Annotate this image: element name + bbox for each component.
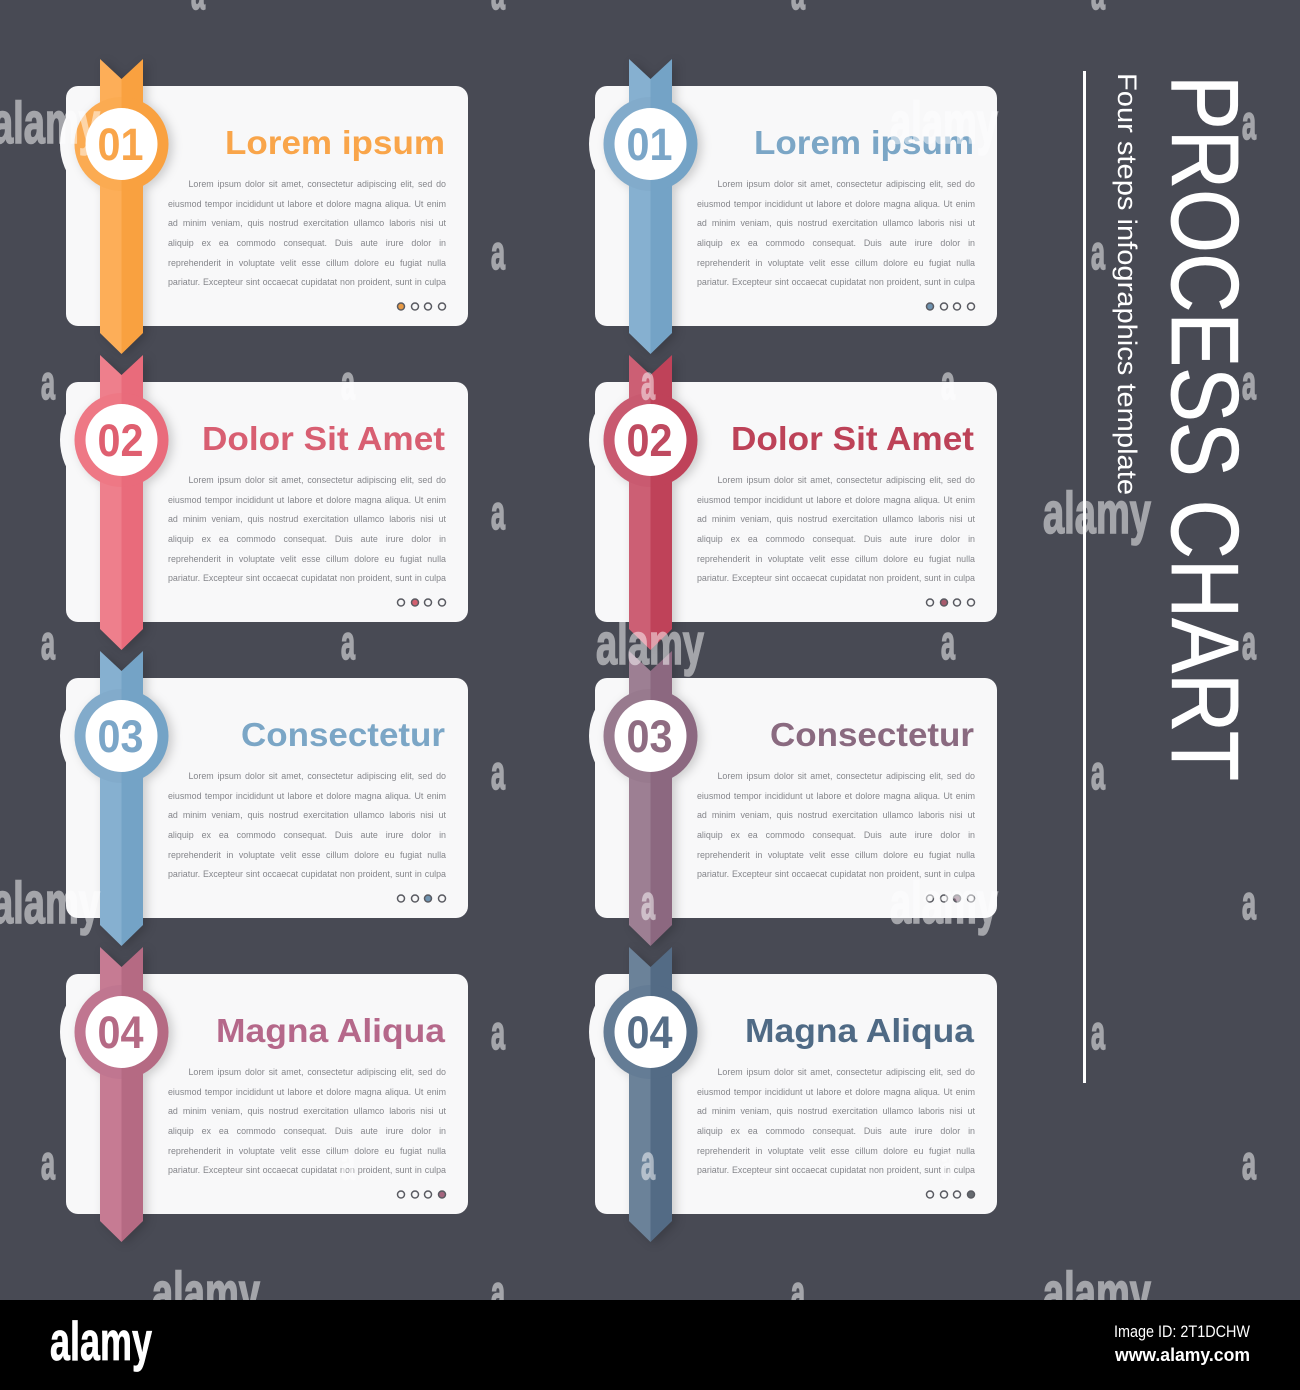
ribbon and badge: Dolor Sit Amet <box>731 420 974 457</box>
ribbon and badge <box>60 651 446 946</box>
watermark overlay: a <box>941 617 955 670</box>
body text: eiusmod tempor incididunt ut labore et dolore magna aliqua. Ut enim <box>168 1087 446 1097</box>
watermark overlay: alamy <box>1043 481 1151 546</box>
watermark overlay: a <box>641 1137 655 1190</box>
body text: ad minim veniam, quis nostrud exercitation ullamco laboris nisi ut <box>697 810 975 820</box>
watermark overlay: alamy <box>1043 1261 1151 1326</box>
body text <box>697 475 975 583</box>
body text: ad minim veniam, quis nostrud exercitation ullamco laboris nisi ut <box>697 514 975 524</box>
watermark overlay: a <box>491 1007 505 1060</box>
body text: ad minim veniam, quis nostrud exercitation ullamco laboris nisi ut <box>697 218 975 228</box>
ribbon and badge: 03 <box>98 711 144 762</box>
watermark overlay: a <box>1242 1137 1256 1190</box>
body text: pariatur. Excepteur sint occaecat cupidatat non proident, sunt in culpa <box>697 869 975 879</box>
body text: ad minim veniam, quis nostrud exercitation ullamco laboris nisi ut <box>168 218 446 228</box>
body text: reprehenderit in voluptate velit esse cillum dolore eu fugiat nulla <box>168 850 446 860</box>
watermark overlay: a <box>491 227 505 280</box>
body text <box>697 1067 975 1175</box>
title block: rotated heading, subtitle and rule <box>1083 71 1258 1083</box>
ribbon and badge <box>589 59 976 354</box>
body text: pariatur. Excepteur sint occaecat cupidatat non proident, sunt in culpa <box>697 1165 975 1175</box>
watermark overlay: a <box>341 1137 355 1190</box>
body text: pariatur. Excepteur sint occaecat cupidatat non proident, sunt in culpa <box>168 277 446 287</box>
body text: pariatur. Excepteur sint occaecat cupidatat non proident, sunt in culpa <box>168 1165 446 1175</box>
image id: Image ID: 2T1DCHW <box>1114 1322 1250 1341</box>
watermark overlay: a <box>341 357 355 410</box>
panel: second column step 04 slate <box>589 947 997 1242</box>
ribbon and badge <box>60 59 446 354</box>
body text: reprehenderit in voluptate velit esse cillum dolore eu fugiat nulla <box>697 258 975 268</box>
watermark overlay: a <box>791 1267 805 1320</box>
watermark overlay: a <box>1091 1007 1105 1060</box>
body text: Lorem ipsum dolor sit amet, consectetur adipiscing elit, sed do <box>188 475 446 485</box>
watermark overlay: a <box>1242 357 1256 410</box>
ribbon and badge: Consectetur <box>770 716 974 753</box>
watermark overlay: a <box>941 1137 955 1190</box>
card background <box>595 678 997 918</box>
subtitle: Four steps infographics template <box>1112 73 1142 495</box>
title: PROCESS CHART <box>1151 75 1258 781</box>
body text: ad minim veniam, quis nostrud exercitation ullamco laboris nisi ut <box>168 1106 446 1116</box>
panel: second column step 03 plum <box>589 651 997 946</box>
body text <box>697 771 975 879</box>
watermark overlay: a <box>1242 97 1256 150</box>
ribbon and badge: 04 <box>626 1007 672 1058</box>
watermark overlay: a <box>491 487 505 540</box>
ribbon and badge <box>60 355 446 650</box>
body text: aliquip ex ea commodo consequat. Duis aute irure dolor in <box>168 1126 446 1136</box>
body text: aliquip ex ea commodo consequat. Duis aute irure dolor in <box>697 830 975 840</box>
body text <box>697 179 975 287</box>
ribbon and badge: 01 <box>626 119 672 170</box>
body text: aliquip ex ea commodo consequat. Duis aute irure dolor in <box>697 238 975 248</box>
ribbon and badge: 04 <box>98 1007 144 1058</box>
ribbon and badge <box>589 651 976 946</box>
ribbon and badge: Dolor Sit Amet <box>202 420 445 457</box>
ribbon and badge <box>589 947 976 1242</box>
watermark overlay: a <box>41 1137 55 1190</box>
body text: reprehenderit in voluptate velit esse cillum dolore eu fugiat nulla <box>697 850 975 860</box>
body text: Lorem ipsum dolor sit amet, consectetur adipiscing elit, sed do <box>718 771 975 781</box>
body text: eiusmod tempor incididunt ut labore et dolore magna aliqua. Ut enim <box>168 199 446 209</box>
ribbon and badge: 03 <box>626 711 672 762</box>
body text: eiusmod tempor incididunt ut labore et dolore magna aliqua. Ut enim <box>697 1087 975 1097</box>
body text <box>168 179 446 287</box>
body text: Lorem ipsum dolor sit amet, consectetur adipiscing elit, sed do <box>188 771 446 781</box>
watermark overlay: a <box>1091 227 1105 280</box>
body text: aliquip ex ea commodo consequat. Duis aute irure dolor in <box>168 830 446 840</box>
body text: reprehenderit in voluptate velit esse cillum dolore eu fugiat nulla <box>168 258 446 268</box>
panel: step 04 mauve <box>60 947 468 1242</box>
website: www.alamy.com <box>1114 1345 1250 1365</box>
panel: second column step 01 blue <box>589 59 997 354</box>
body text: aliquip ex ea commodo consequat. Duis aute irure dolor in <box>168 534 446 544</box>
body text: eiusmod tempor incididunt ut labore et dolore magna aliqua. Ut enim <box>697 495 975 505</box>
ribbon and badge: 02 <box>98 415 144 466</box>
body text: eiusmod tempor incididunt ut labore et dolore magna aliqua. Ut enim <box>697 199 975 209</box>
card background <box>595 382 997 622</box>
body text: pariatur. Excepteur sint occaecat cupidatat non proident, sunt in culpa <box>697 277 975 287</box>
ribbon and badge <box>60 947 446 1242</box>
watermark overlay: a <box>41 357 55 410</box>
body text <box>168 475 446 583</box>
card background <box>66 974 468 1214</box>
watermark overlay: alamy <box>596 612 704 677</box>
body text: aliquip ex ea commodo consequat. Duis aute irure dolor in <box>697 1126 975 1136</box>
card background <box>66 678 468 918</box>
body text: eiusmod tempor incididunt ut labore et dolore magna aliqua. Ut enim <box>168 791 446 801</box>
watermark overlay: alamy <box>152 1261 260 1326</box>
watermark overlay: a <box>1242 617 1256 670</box>
body text: Lorem ipsum dolor sit amet, consectetur adipiscing elit, sed do <box>718 1067 975 1077</box>
ribbon and badge: 02 <box>626 415 672 466</box>
watermark overlay: a <box>641 877 655 930</box>
vertical rule <box>1083 71 1086 1083</box>
card background <box>595 974 997 1214</box>
body text: aliquip ex ea commodo consequat. Duis aute irure dolor in <box>168 238 446 248</box>
footer band with stock credit <box>0 1300 1300 1390</box>
watermark overlay: a <box>1091 747 1105 800</box>
ribbon and badge: Magna Aliqua <box>745 1012 975 1049</box>
watermark overlay: a <box>341 617 355 670</box>
body text: Lorem ipsum dolor sit amet, consectetur adipiscing elit, sed do <box>188 179 446 189</box>
panel: second column step 02 crimson <box>589 355 997 650</box>
watermark overlay: a <box>491 747 505 800</box>
body text: ad minim veniam, quis nostrud exercitation ullamco laboris nisi ut <box>168 810 446 820</box>
body text: eiusmod tempor incididunt ut labore et dolore magna aliqua. Ut enim <box>168 495 446 505</box>
body text <box>168 771 446 879</box>
watermark overlay: alamy <box>890 91 998 156</box>
body text <box>168 1067 446 1175</box>
body text: reprehenderit in voluptate velit esse cillum dolore eu fugiat nulla <box>697 1146 975 1156</box>
body text: Lorem ipsum dolor sit amet, consectetur adipiscing elit, sed do <box>718 179 975 189</box>
body text: ad minim veniam, quis nostrud exercitation ullamco laboris nisi ut <box>168 514 446 524</box>
panel: step 02 coral <box>60 355 468 650</box>
watermark overlay: alamy <box>890 871 998 936</box>
card background <box>66 382 468 622</box>
body text: reprehenderit in voluptate velit esse cillum dolore eu fugiat nulla <box>697 554 975 564</box>
body text: reprehenderit in voluptate velit esse cillum dolore eu fugiat nulla <box>168 554 446 564</box>
watermark overlay: a <box>491 1267 505 1320</box>
body text: pariatur. Excepteur sint occaecat cupidatat non proident, sunt in culpa <box>168 869 446 879</box>
ribbon and badge: Lorem ipsum <box>225 124 445 161</box>
ribbon and badge: Lorem ipsum <box>754 124 974 161</box>
panel: step 03 blue <box>60 651 468 946</box>
body text: ad minim veniam, quis nostrud exercitation ullamco laboris nisi ut <box>697 1106 975 1116</box>
footer logo: alamy <box>50 1310 152 1372</box>
card background <box>595 86 997 326</box>
ribbon and badge <box>589 355 976 650</box>
watermark overlay: a <box>41 617 55 670</box>
ribbon and badge: 01 <box>98 119 144 170</box>
ribbon and badge: Magna Aliqua <box>216 1012 446 1049</box>
body text: Lorem ipsum dolor sit amet, consectetur adipiscing elit, sed do <box>718 475 975 485</box>
panel: step 01 orange <box>60 59 468 354</box>
watermark overlay: a <box>1242 877 1256 930</box>
watermark overlay: a <box>641 357 655 410</box>
body text: reprehenderit in voluptate velit esse cillum dolore eu fugiat nulla <box>168 1146 446 1156</box>
watermark overlay: a <box>941 357 955 410</box>
body text: pariatur. Excepteur sint occaecat cupidatat non proident, sunt in culpa <box>697 573 975 583</box>
body text: aliquip ex ea commodo consequat. Duis aute irure dolor in <box>697 534 975 544</box>
body text: pariatur. Excepteur sint occaecat cupidatat non proident, sunt in culpa <box>168 573 446 583</box>
card background <box>66 86 468 326</box>
ribbon and badge: Consectetur <box>241 716 445 753</box>
body text: Lorem ipsum dolor sit amet, consectetur adipiscing elit, sed do <box>188 1067 446 1077</box>
body text: eiusmod tempor incididunt ut labore et dolore magna aliqua. Ut enim <box>697 791 975 801</box>
